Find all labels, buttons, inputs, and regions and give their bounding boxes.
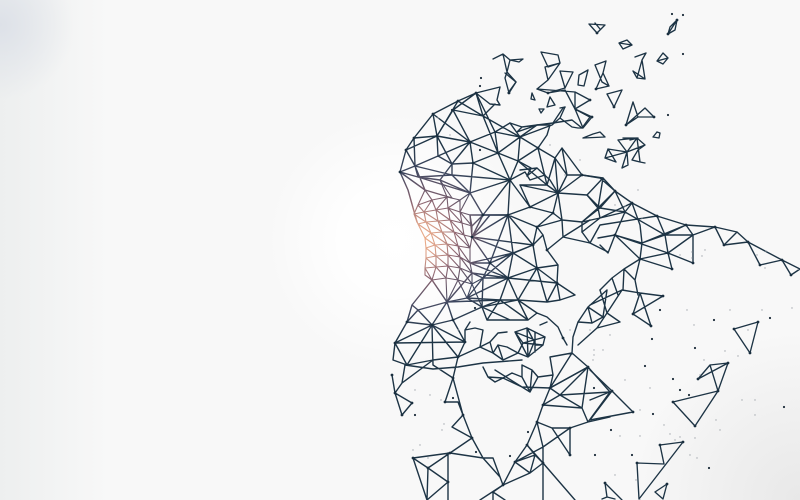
head and torso wire mesh	[392, 87, 800, 500]
fragment cluster: upper hair	[493, 52, 654, 125]
loose triangles near the shoulder	[602, 322, 758, 500]
floating triangle fragments above the head	[493, 20, 677, 168]
lower arm and fingers	[483, 290, 663, 420]
triangle group: lower right	[602, 442, 683, 500]
cheek and jaw mesh	[432, 215, 608, 307]
white glow in front of the face	[265, 110, 525, 370]
fragment cluster: top	[589, 20, 677, 79]
torso lower mesh	[392, 360, 610, 500]
scattered particles	[413, 14, 792, 500]
neck and shoulder band	[582, 175, 800, 295]
fragment cluster: broken crown	[505, 73, 660, 168]
mesh node dots	[392, 20, 791, 485]
cupped hand mesh	[480, 328, 545, 360]
dense nose and mouth mesh	[414, 180, 483, 307]
skull mesh	[400, 87, 603, 227]
triangle: isolated	[734, 322, 758, 353]
dark particles	[415, 14, 784, 468]
triangle pair: middle right	[673, 363, 728, 426]
hair strands and broken top edge	[510, 107, 590, 220]
grey particles	[413, 118, 792, 500]
chest and arm mesh	[393, 280, 563, 378]
